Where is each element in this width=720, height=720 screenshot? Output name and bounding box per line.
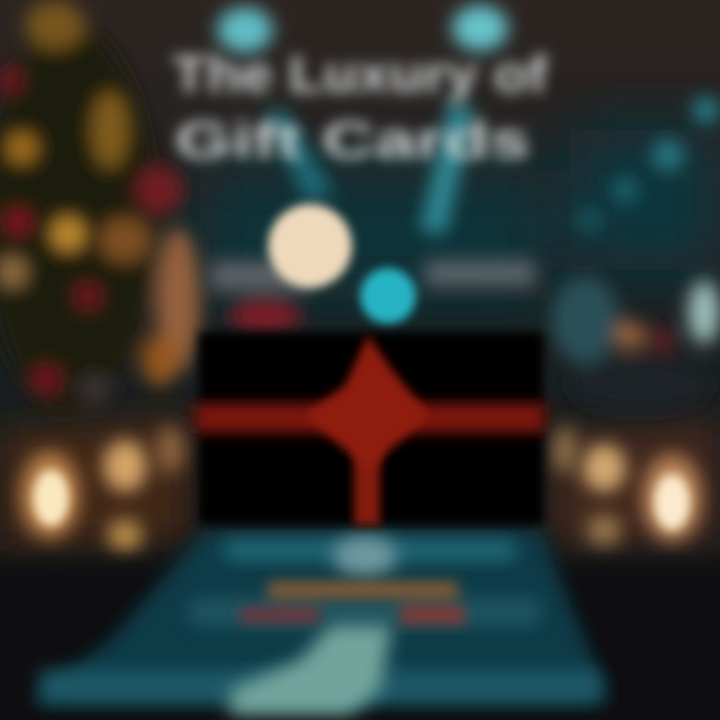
- bottom colorful label: [240, 582, 465, 624]
- gift box: [195, 332, 545, 525]
- title: [172, 46, 548, 170]
- top teal orbs and light streaks: [217, 5, 508, 235]
- ribbon horizontal: [195, 403, 545, 433]
- teal glow behind title: [200, 130, 720, 300]
- floor teal steps: [0, 530, 720, 720]
- lanterns left: [0, 415, 190, 551]
- title: Gift Cards: [175, 112, 530, 170]
- bow: [305, 335, 430, 470]
- teal orb: [360, 268, 416, 324]
- ribbon vertical: [354, 430, 380, 525]
- cream orb: [268, 204, 352, 288]
- subtitle band: [210, 260, 535, 334]
- christmas tree: [0, 1, 200, 415]
- title: The Luxury of: [172, 46, 548, 104]
- right side decorations: [551, 97, 720, 411]
- lanterns right: [550, 420, 720, 546]
